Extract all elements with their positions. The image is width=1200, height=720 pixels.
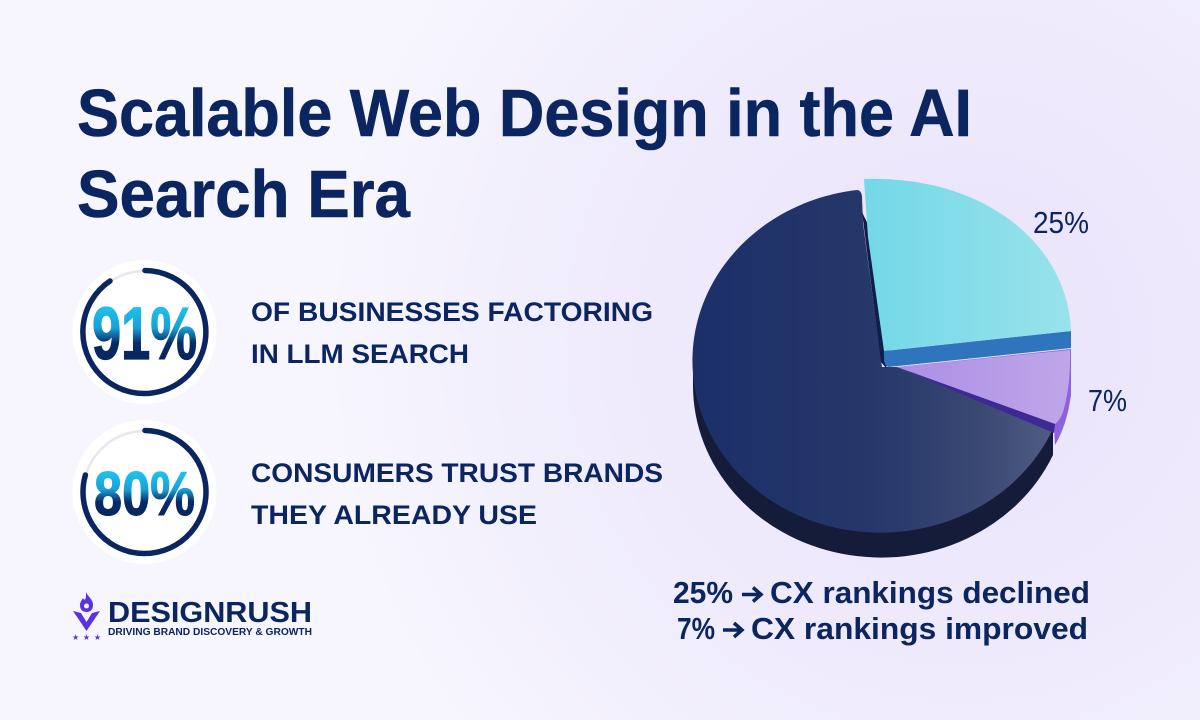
text: 80 percent description <box>251 458 663 530</box>
pie label: 25 percent: 25% <box>1033 205 1089 240</box>
title: Search Era <box>77 157 411 232</box>
icon: flame and V with stars: ★★★ <box>72 633 101 642</box>
text: 80 percent description: CONSUMERS TRUST BRANDS <box>251 458 663 488</box>
pie slice: cyan 25 percent <box>864 179 1071 367</box>
pie slice: navy 68 percent side <box>693 358 1053 558</box>
text: 91 percent description <box>251 297 653 369</box>
text: 91 percent description: IN LLM SEARCH <box>251 339 469 369</box>
legend line: 25 percent declined: CX rankings declined <box>770 575 1090 610</box>
text: 91 percent description: OF BUSINESSES FACTORING <box>251 297 653 327</box>
logo wordmark: DESIGNRUSH <box>108 597 312 629</box>
stat: 91 percent <box>72 260 653 404</box>
legend line: 7 percent improved: 7% <box>677 611 715 646</box>
text: 80 percent description: THEY ALREADY USE <box>251 500 537 530</box>
legend line: 25 percent declined: 25% <box>673 575 733 610</box>
badge: 91 percent ring: 91% <box>92 292 197 375</box>
pie slice: navy inner shadow <box>862 212 890 368</box>
pie slice: lilac 7 percent <box>897 349 1071 445</box>
badge: 80 percent ring: 80% <box>94 460 195 529</box>
icon: flame and V with stars <box>72 592 101 642</box>
pie label: 7 percent: 7% <box>1088 383 1127 418</box>
logo: DesignRush <box>72 592 312 642</box>
title <box>77 76 972 232</box>
pie chart <box>692 179 1071 558</box>
badge: 80 percent ring <box>72 420 216 564</box>
chart legend text <box>673 575 1090 646</box>
logo tagline: DRIVING BRAND DISCOVERY & GROWTH <box>108 626 312 638</box>
stat: 80 percent <box>72 420 663 564</box>
legend line: 7 percent improved: CX rankings improved <box>751 611 1088 646</box>
pie slice: navy 68 percent top <box>692 190 1053 533</box>
badge: 91 percent ring <box>72 260 216 404</box>
title: Scalable Web Design in the AI <box>77 76 972 151</box>
